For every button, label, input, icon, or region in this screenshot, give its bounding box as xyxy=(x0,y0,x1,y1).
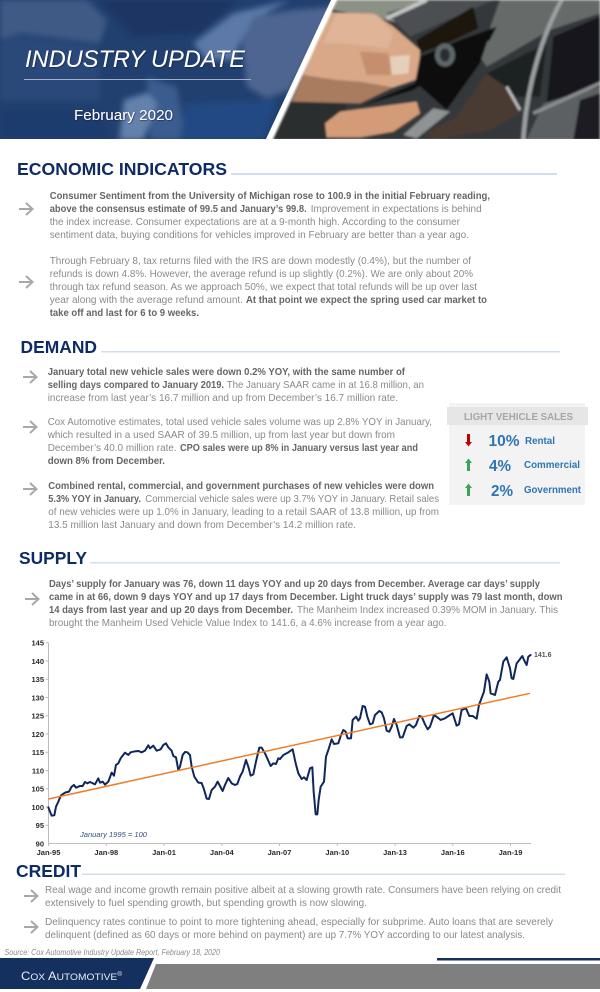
paragraph: tax refunds: year along with the average refund amount. xyxy=(50,294,243,306)
header photo: hand on car door handle xyxy=(273,0,600,140)
paragraph: delinquency: delinquent (defined as 60 days or more behind on payment) are up 7.7% YOY according to our latest analysis. xyxy=(45,929,525,941)
paragraph: used vehicle sales: CPO sales were up 8% in January versus last year and xyxy=(180,442,418,454)
paragraph: fleet sales: Commercial vehicle sales were up 3.7% YOY in January. Retail sales xyxy=(145,493,439,505)
y axis labels: 115 xyxy=(32,748,44,757)
paragraph: delinquency: Delinquency rates continue to point to more tightening ahead, especially for subprime. Auto loans that are severely xyxy=(45,916,554,928)
paragraph: fleet sales: 5.3% YOY in January. xyxy=(48,493,141,505)
paragraph: days supply: Days’ supply for January was 76, down 11 days YOY and up 20 days from December. Average car days’ supply xyxy=(49,578,540,590)
panel header band xyxy=(447,407,588,425)
heading rule xyxy=(90,562,560,564)
footer gray band xyxy=(146,964,600,989)
heading: ECONOMIC INDICATORS xyxy=(17,159,227,179)
paragraph: days supply: brought the Manheim Used Vehicle Value Index to 141.6, a 4.6% increase from a year ago. xyxy=(49,617,446,629)
panel: light vehicle sales xyxy=(447,403,588,505)
x axis labels: Jan-04 xyxy=(210,848,235,857)
y axis labels: 110 xyxy=(32,766,44,775)
paragraph: days supply: The Manheim Index increased 0.39% MOM in January. This xyxy=(297,604,558,616)
paragraph: tax refunds: take off and last for 6 to 9 weeks. xyxy=(50,307,199,319)
rental label: Rental xyxy=(525,435,555,447)
y axis labels: 105 xyxy=(31,784,44,794)
heading: SUPPLY xyxy=(19,548,87,568)
y axis labels: 95 xyxy=(36,821,44,830)
paragraph: fleet sales: of new vehicles were up 1.0% in January, leading to a retail SAAR of 13.8 million, up from xyxy=(48,506,439,518)
x axis labels: Jan-95 xyxy=(37,848,60,857)
paragraph: days supply xyxy=(49,578,562,629)
heading rule xyxy=(101,351,560,352)
x axis labels: Jan-98 xyxy=(94,848,118,857)
paragraph: tax refunds: At that point we expect the spring used car market to xyxy=(246,294,487,306)
paragraph: used vehicle sales: Cox Automotive estimates, total used vehicle sales volume was up 2.8% YOY in January, xyxy=(48,416,432,428)
section: demand xyxy=(20,337,560,531)
y axis labels: 145 xyxy=(31,638,44,648)
arrow icon xyxy=(23,421,36,433)
section: credit xyxy=(16,861,565,941)
y axis labels: 140 xyxy=(31,657,44,666)
heading: DEMAND xyxy=(20,337,97,357)
government label: Government xyxy=(524,484,581,496)
x axis labels: Jan-16 xyxy=(441,848,465,857)
paragraph: days supply: 14 days from last year and up 20 days from December. xyxy=(49,604,293,616)
paragraph: consumer sentiment: sentiment data, buying conditions for vehicles improved in February are better than a year ago. xyxy=(50,229,469,241)
x axis labels: Jan-10 xyxy=(325,848,349,857)
y axis labels: 125 xyxy=(31,712,44,721)
paragraph: tax refunds: Through February 8, tax returns filed with the IRS are down modestly (0.4%), but the number of xyxy=(50,255,471,267)
axes xyxy=(46,642,531,846)
date: February 2020 xyxy=(74,107,173,124)
paragraph: delinquency xyxy=(45,916,554,941)
y axis labels: 90 xyxy=(36,839,44,848)
paragraph: new vehicle sales: selling days compared to January 2019. xyxy=(48,379,224,391)
commercial value: 4% xyxy=(489,458,511,475)
paragraph: new vehicle sales xyxy=(48,366,424,404)
x axis labels: Jan-13 xyxy=(383,848,407,857)
footer logo text: ® xyxy=(117,971,123,978)
x axis labels: Jan-01 xyxy=(152,848,176,857)
paragraph: consumer sentiment: Consumer Sentiment from the University of Michigan rose to 100.9 in the initial February reading, xyxy=(50,190,490,202)
y axis labels: 120 xyxy=(31,730,44,739)
header photo: blurred blue sleeve background xyxy=(0,0,340,140)
x axis labels xyxy=(37,848,522,857)
x axis labels: Jan-07 xyxy=(268,848,291,857)
arrow icon xyxy=(19,203,32,215)
government value: 2% xyxy=(491,483,513,500)
footer logo text: COX AUTOMOTIVE xyxy=(21,969,113,983)
source note: Source: Cox Automotive Industry Update Report, February 18, 2020 xyxy=(4,948,220,957)
footer top accent xyxy=(437,958,600,960)
paragraph: consumer sentiment: above the consensus estimate of 99.5 and January’s 99.8. xyxy=(50,203,307,215)
paragraph: used vehicle sales: which resulted in a used SAAR of 39.5 million, up from last year but down from xyxy=(47,429,395,441)
footer xyxy=(0,958,600,989)
commercial label: Commercial xyxy=(524,459,580,471)
paragraph: wage growth: Real wage and income growth remain positive albeit at a slowing growth rate. Consumers have been relying on credit xyxy=(45,884,561,896)
paragraph: new vehicle sales: The January SAAR came in at 16.8 million, an xyxy=(227,379,424,391)
heading rule xyxy=(231,173,557,175)
paragraph: consumer sentiment xyxy=(50,190,490,241)
trend line xyxy=(48,693,530,799)
arrow icon xyxy=(24,890,38,902)
arrow icon xyxy=(19,276,32,288)
paragraph: tax refunds: through tax refund season. As we approach 50%, we expect that total refunds will be up over last xyxy=(50,281,477,293)
paragraph: fleet sales: Combined rental, commercial, and government purchases of new vehicles were down xyxy=(48,480,434,492)
paragraph: tax refunds: refunds is down 4.8%. However, the average refund is up slightly (0.2%). We are only about 20% xyxy=(50,268,473,280)
paragraph: consumer sentiment: Improvement in expectations is behind xyxy=(311,203,482,215)
rental value: 10% xyxy=(488,433,520,450)
panel background xyxy=(449,403,585,505)
paragraph: fleet sales: 13.5 million last January and down from December’s 14.2 million rate. xyxy=(48,519,356,531)
arrow icon xyxy=(25,593,38,605)
y axis labels: 100 xyxy=(31,803,44,812)
paragraph: fleet sales xyxy=(48,480,439,531)
title: INDUSTRY UPDATE xyxy=(25,46,246,73)
paragraph: wage growth: extensively to fuel spending growth, but spending growth is now slowing. xyxy=(45,897,367,909)
arrow icon xyxy=(23,371,36,383)
heading rule xyxy=(82,874,565,875)
paragraph: wage growth xyxy=(45,884,561,909)
y axis labels xyxy=(31,638,44,848)
paragraph: new vehicle sales: increase from last year’s 16.7 million and up from December’s 16.7 million rate. xyxy=(48,392,398,404)
paragraph: new vehicle sales: January total new vehicle sales were down 0.2% YOY, with the same number of xyxy=(48,366,405,378)
panel heading: LIGHT VEHICLE SALES xyxy=(464,412,573,423)
paragraph: consumer sentiment: the index increase. Consumer expectations are at a 9-month high. According to the consumer xyxy=(50,216,460,228)
footer navy block xyxy=(0,958,154,989)
section: supply xyxy=(19,548,562,629)
y axis labels: 135 xyxy=(31,675,44,684)
icon: red down arrow xyxy=(465,434,472,446)
paragraph: used vehicle sales xyxy=(47,416,432,467)
paragraph: used vehicle sales: down 8% from December. xyxy=(48,455,165,467)
end value label: 141.6 xyxy=(534,652,552,659)
x axis labels: Jan-19 xyxy=(499,848,522,857)
index series line xyxy=(48,655,531,816)
title rule xyxy=(24,79,251,80)
header banner xyxy=(0,0,600,140)
y axis labels: 130 xyxy=(31,693,44,702)
section: economic indicators xyxy=(17,159,557,319)
icon: green up arrow xyxy=(465,458,472,471)
paragraph: used vehicle sales: December’s 40.0 million rate. xyxy=(48,442,177,454)
line chart: Manheim Used Vehicle Value Index xyxy=(31,638,552,857)
arrow icon xyxy=(24,921,38,933)
base note: January 1995 = 100 xyxy=(79,830,148,839)
arrow icon xyxy=(23,483,36,495)
heading: CREDIT xyxy=(16,861,81,881)
paragraph: tax refunds xyxy=(50,255,487,319)
diagonal white divider xyxy=(266,0,336,139)
icon: green up arrow xyxy=(465,484,472,496)
